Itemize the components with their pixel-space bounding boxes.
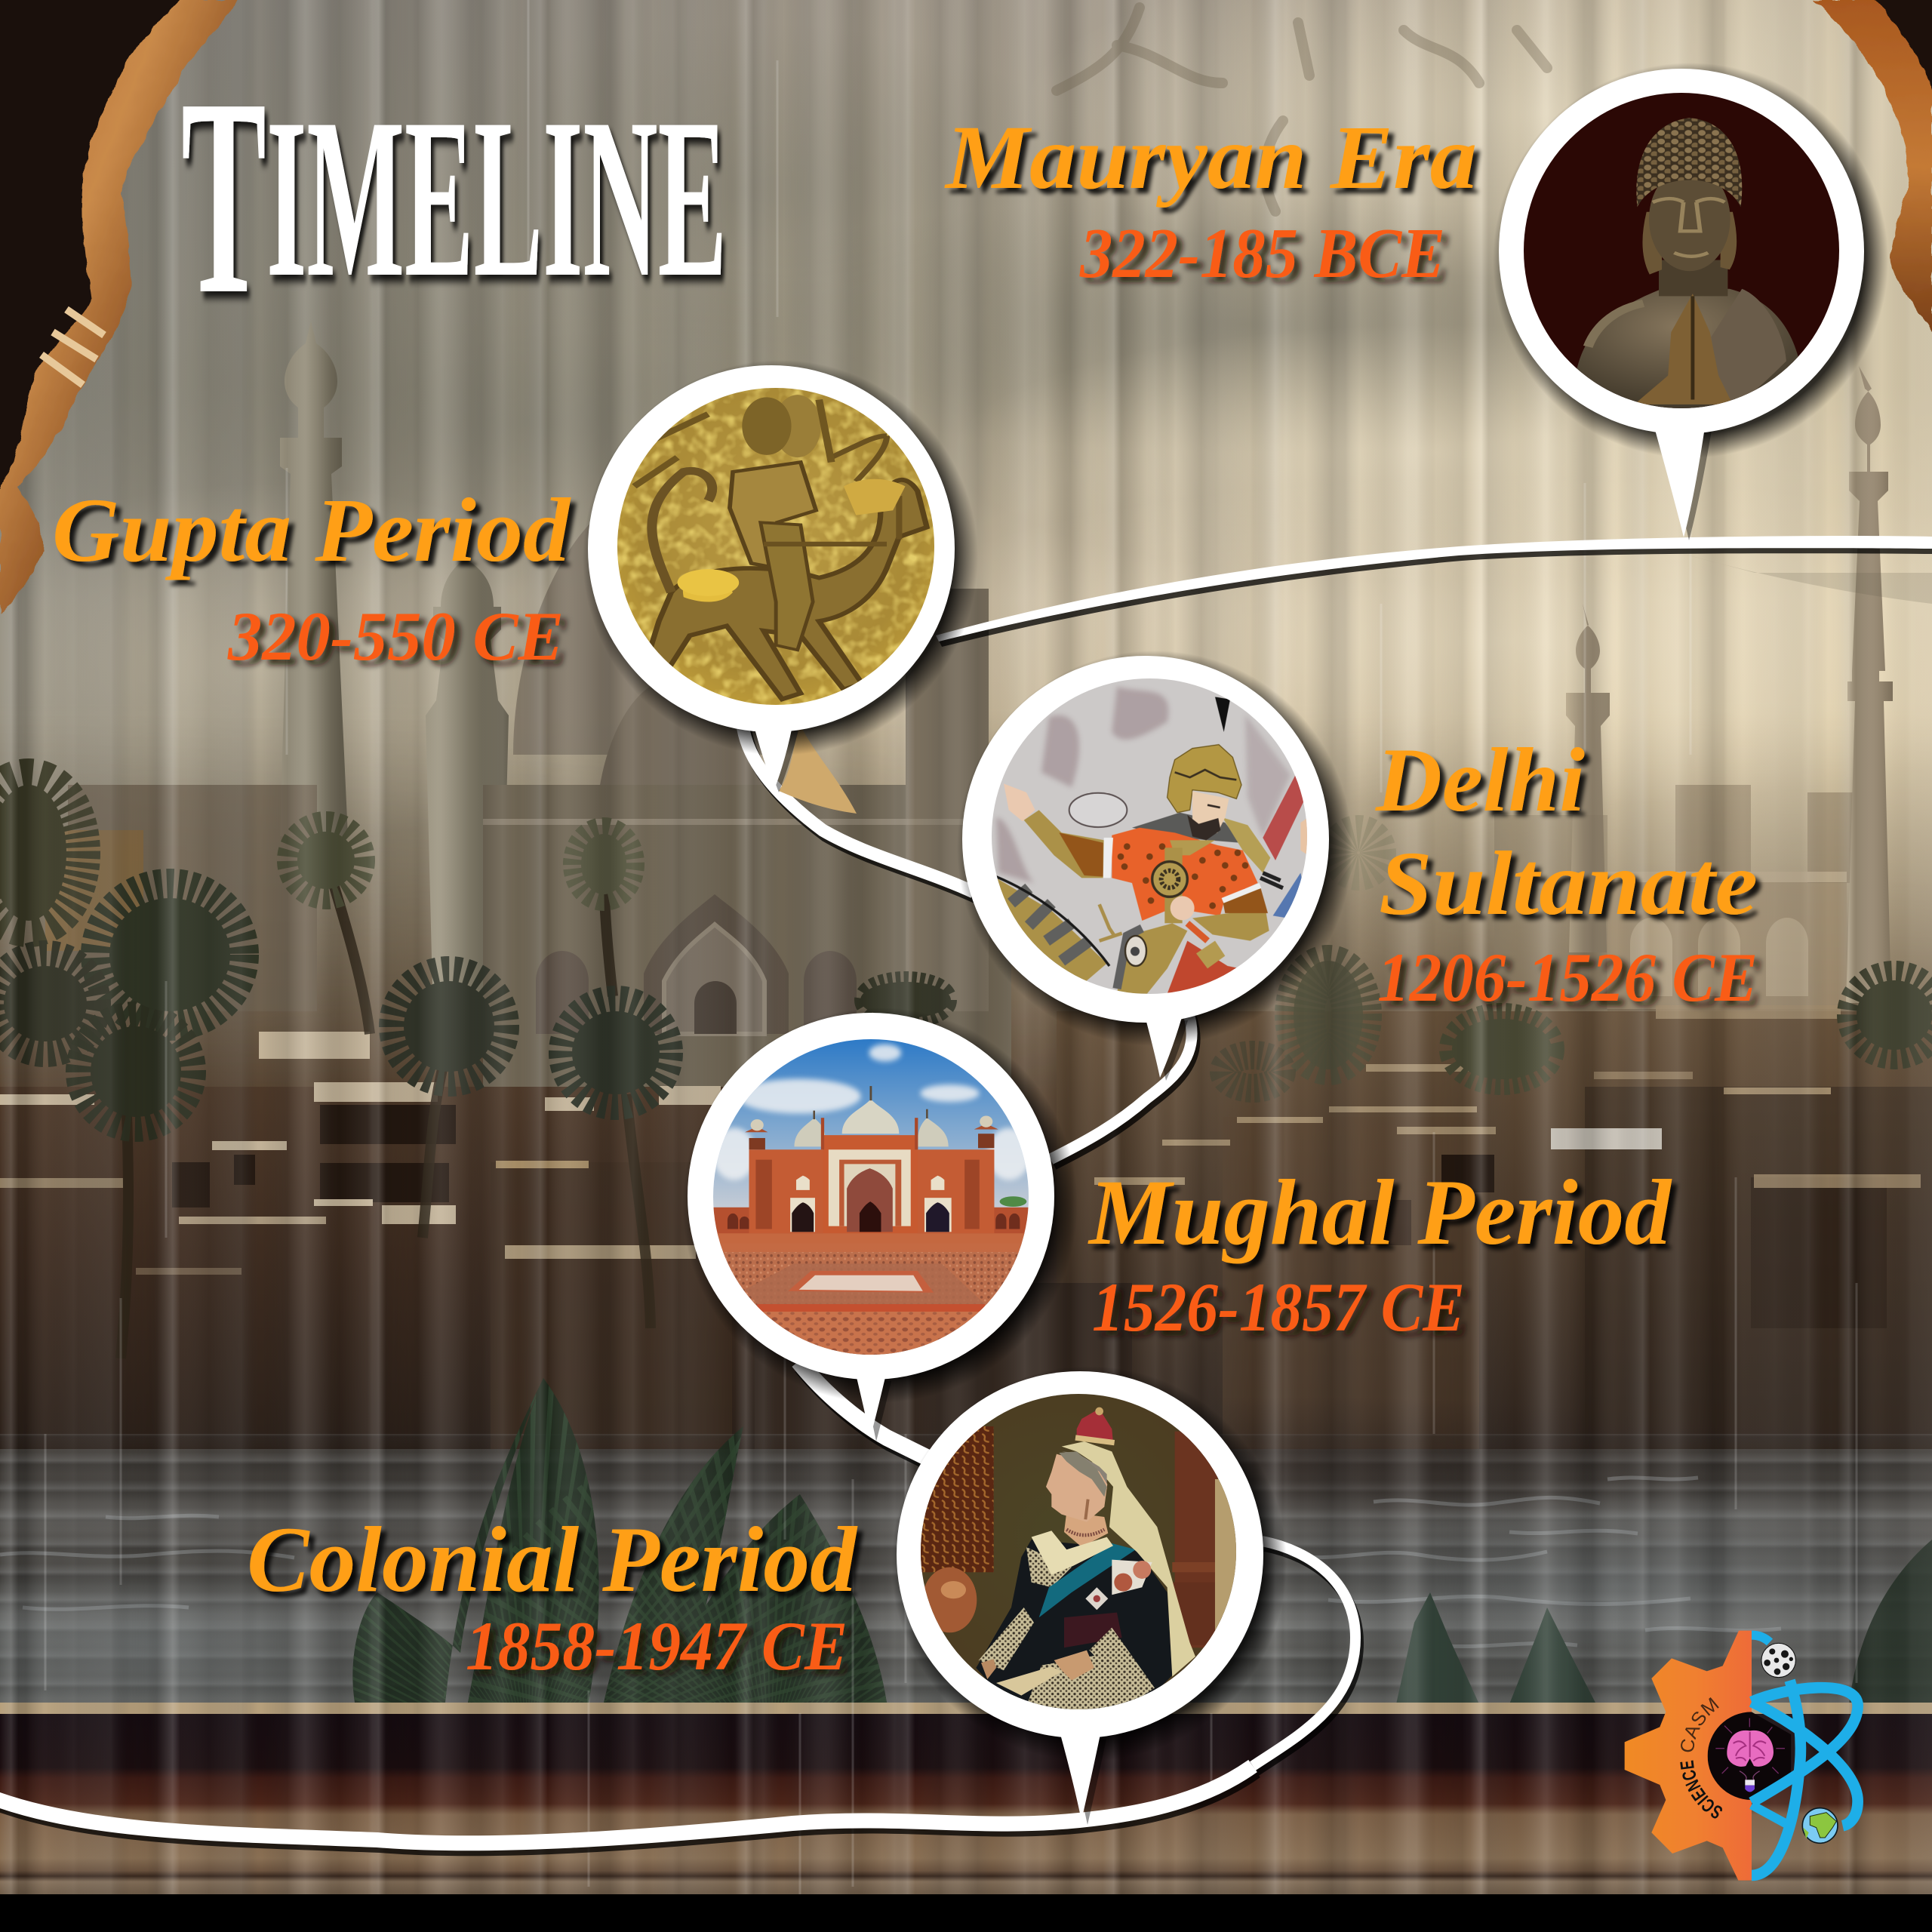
distant right palace and minarets xyxy=(1494,366,1893,1011)
heading: Mughal Period xyxy=(1088,1161,1672,1346)
icon: orange half gear xyxy=(1625,1631,1752,1881)
heading: Mauryan Era xyxy=(944,107,1477,293)
panel: Delhi Sultanate xyxy=(957,651,1352,1081)
brand wordmark: CASM xyxy=(1681,1697,1719,1752)
heading: Delhi Sultanate: Sultanate xyxy=(1379,833,1758,934)
heading: Delhi Sultanate: Delhi xyxy=(1375,730,1585,831)
heading: Colonial Period: Colonial Period xyxy=(247,1508,858,1611)
pin bubble xyxy=(583,360,978,792)
palm trees xyxy=(0,785,1932,1358)
title: T xyxy=(181,39,266,352)
panel: Gupta Period xyxy=(583,360,978,792)
left arch xyxy=(0,0,237,613)
heading: Delhi Sultanate: 1206-1526 CE xyxy=(1377,939,1758,1016)
distant left minarets and central mosque xyxy=(45,321,1011,1087)
title: IMELINE xyxy=(266,70,727,325)
right arch xyxy=(1813,0,1932,332)
tan fragment under the Gupta bubble xyxy=(779,724,857,814)
brand wordmark xyxy=(1680,1697,1722,1819)
icon: brain and light bulb xyxy=(1715,1718,1785,1792)
stone ledge xyxy=(0,1703,1932,1932)
heading: Gupta Period: Gupta Period xyxy=(52,480,571,581)
heading: Mughal Period: 1526-1857 CE xyxy=(1092,1269,1465,1346)
panel: Mauryan Era xyxy=(1493,63,1888,540)
picture: red sandstone Mughal mosque xyxy=(709,1035,1034,1362)
pin bubble xyxy=(957,651,1352,1081)
pin bubble xyxy=(891,1366,1287,1825)
picture: miniature painting of a Sultan xyxy=(989,675,1313,1000)
icon: moon xyxy=(1761,1643,1795,1678)
heading: Colonial Period: 1858-1947 CE xyxy=(466,1607,848,1684)
heading: Mauryan Era: Mauryan Era xyxy=(944,107,1477,208)
picture: bronze Buddha xyxy=(1517,87,1849,419)
heading: Mughal Period: Mughal Period xyxy=(1088,1161,1672,1264)
brand wordmark: SCIENCE xyxy=(1680,1760,1722,1819)
heading: Colonial Period xyxy=(247,1508,858,1684)
panel: Colonial Period xyxy=(891,1366,1287,1825)
picture: gold coin with horse rider xyxy=(611,381,943,713)
pin bubble xyxy=(1493,63,1888,540)
icon: blue atom orbits xyxy=(1752,1635,1858,1875)
faint ribbon shadow wedge xyxy=(1681,553,1932,604)
heading: Delhi Sultanate xyxy=(1375,730,1758,1016)
panel: Mughal Period xyxy=(682,1008,1078,1441)
picture: portrait of Queen Victoria xyxy=(917,1390,1241,1715)
logo: Sciencegasm gear and atom xyxy=(1624,1630,1863,1881)
pin bubble xyxy=(682,1008,1078,1441)
heading: Gupta Period: 320-550 CE xyxy=(227,598,564,675)
timeline ribbon xyxy=(0,536,1932,1848)
river water xyxy=(0,1396,1932,1728)
stilted brown riverside houses xyxy=(0,1005,1932,1449)
foreground palms xyxy=(325,1374,1932,1932)
heading: Gupta Period xyxy=(52,480,571,675)
icon: central dark hub xyxy=(1685,1700,1794,1811)
heading: Mauryan Era: 322-185 BCE xyxy=(1079,214,1445,293)
icon: earth xyxy=(1802,1808,1838,1843)
